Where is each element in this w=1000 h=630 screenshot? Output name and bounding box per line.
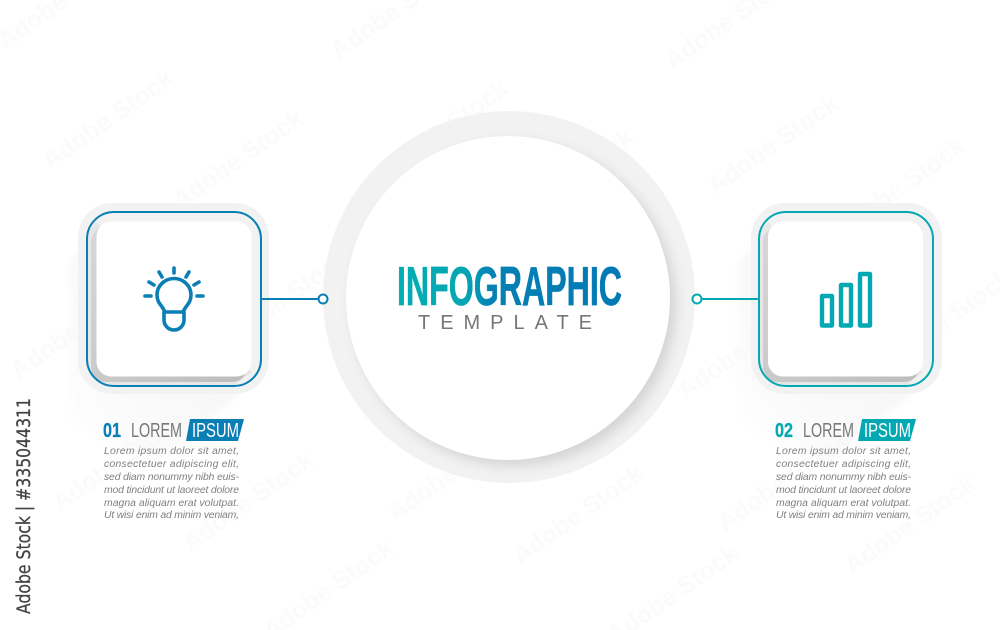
stock watermark pattern: Adobe Stock (672, 294, 814, 405)
stock watermark pattern: Adobe Stock (497, 122, 639, 233)
body text: magna aliquam erat volutpat. (776, 498, 911, 509)
label number 02: 02 (775, 420, 793, 442)
stock watermark pattern: Adobe Stock (47, 406, 189, 517)
connector: right card to circle (692, 294, 759, 304)
panel: left text block (103, 419, 244, 521)
body text: magna aliquam erat volutpat. (104, 498, 239, 509)
body text: consectetuer adipiscing elit, (104, 459, 239, 470)
stock watermark pattern: Adobe Stock (542, 252, 684, 363)
stock watermark pattern: Adobe Stock (37, 64, 179, 175)
body text: Lorem ipsum dolor sit amet, (104, 446, 239, 457)
body text: sed diam nonummy nibh euis- (104, 472, 240, 483)
stock watermark pattern: Adobe Stock (212, 244, 354, 355)
stock watermark pattern: Adobe Stock (712, 426, 854, 537)
icon: light bulb (145, 268, 203, 330)
label IPSUM tag: IPSUM (192, 420, 239, 442)
title: INFOGRAPHIC: INFOGRAPHIC (397, 255, 622, 317)
panel: left card (70, 203, 328, 470)
panel: right card (692, 203, 942, 470)
stock watermark pattern: Adobe Stock (507, 459, 649, 570)
stock watermark pattern: Adobe Stock (382, 416, 524, 527)
body text: consectetuer adipiscing elit, (776, 459, 911, 470)
stock watermark pattern: Adobe Stock (167, 104, 309, 215)
body text (104, 446, 240, 521)
body text: mod tincidunt ut laoreet dolore (776, 485, 911, 496)
label LOREM: LOREM (131, 420, 182, 442)
label number 01: 01 (103, 420, 121, 442)
stock watermark pattern: Adobe Stock (839, 469, 981, 580)
side credit text: Adobe Stock | #335044311 (14, 398, 35, 614)
body text (776, 446, 912, 521)
stock watermark pattern: Adobe Stock (372, 74, 514, 185)
body text: Lorem ipsum dolor sit amet, (776, 446, 911, 457)
stock watermark pattern: Adobe Stock (829, 132, 971, 243)
body text: Ut wisi enim ad minim veniam, (776, 510, 911, 521)
icon: bar chart (822, 274, 870, 326)
panel: right text block (775, 419, 916, 521)
connector: left card to circle (261, 294, 328, 304)
subtitle: TEMPLATE: TEMPLATE (418, 312, 592, 334)
stock watermark pattern: Adobe Stock (177, 446, 319, 557)
label IPSUM tag: IPSUM (864, 420, 911, 442)
panel: central circle (323, 111, 695, 483)
body text: mod tincidunt ut laoreet dolore (104, 485, 239, 496)
stock watermark pattern: Adobe Stock (5, 274, 147, 385)
stock watermark pattern: Adobe Stock (702, 89, 844, 200)
body text: sed diam nonummy nibh euis- (776, 472, 912, 483)
stock watermark pattern: Adobe Stock (339, 282, 481, 393)
label LOREM: LOREM (803, 420, 854, 442)
body text: Ut wisi enim ad minim veniam, (104, 510, 239, 521)
